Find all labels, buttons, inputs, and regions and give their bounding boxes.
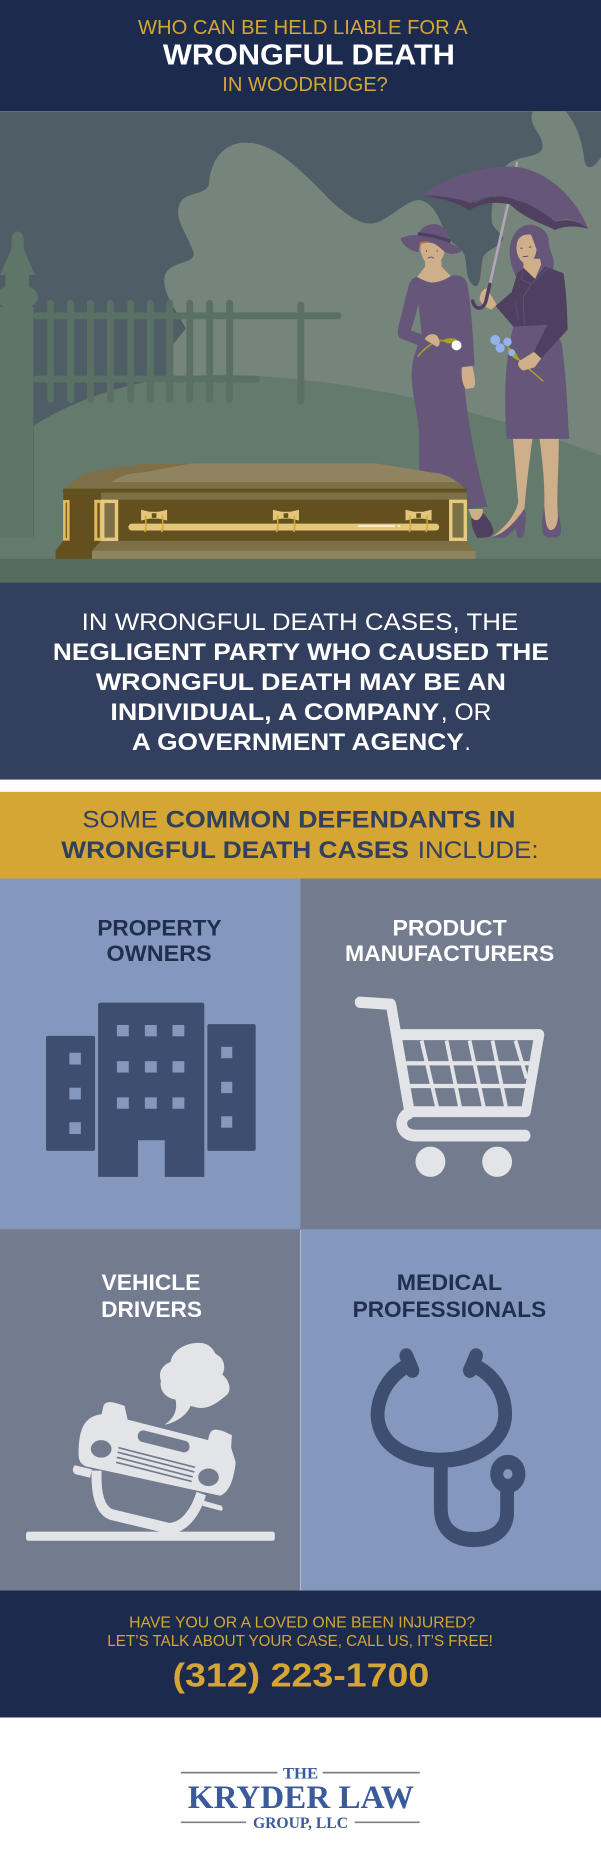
logo name: KRYDER LAW <box>188 1779 414 1815</box>
tile: property owners <box>0 879 300 1230</box>
hair <box>510 225 554 280</box>
intro line 1: IN WRONGFUL DEATH CASES, THE <box>82 608 518 635</box>
icon: stethoscope <box>378 1356 525 1540</box>
call to action panel <box>0 1591 601 1717</box>
legs <box>493 437 533 537</box>
handle bar <box>128 524 439 530</box>
tile heading: MANUFACTURERS <box>345 941 554 966</box>
tile heading: PROPERTY <box>97 915 222 941</box>
tile heading <box>97 915 222 966</box>
head <box>420 241 445 265</box>
bow middle <box>273 510 299 532</box>
skirt <box>505 325 569 439</box>
neck and chest <box>417 261 452 286</box>
flower <box>418 340 454 356</box>
hill <box>0 375 601 560</box>
flowers <box>508 347 543 381</box>
face <box>426 250 437 259</box>
hand holding flowers <box>518 352 541 371</box>
shaft top <box>516 162 517 171</box>
phone number: (312) 223-1700 <box>172 1656 429 1694</box>
illustration: funeral scene <box>0 111 601 585</box>
tile heading: MEDICAL <box>397 1270 502 1295</box>
logo rules <box>181 1773 420 1822</box>
car roof <box>97 1471 201 1528</box>
hat band <box>418 234 450 241</box>
tile: product manufacturers <box>300 879 601 1230</box>
intro line 4: INDIVIDUAL, A COMPANY <box>110 698 440 725</box>
trees <box>164 111 601 498</box>
cta line 2: LET’S TALK ABOUT YOUR CASE, CALL US, IT’S FREE! <box>107 1633 493 1650</box>
intro line 5: A GOVERNMENT AGENCY <box>132 728 464 755</box>
left end <box>56 489 101 559</box>
car body <box>79 1402 236 1496</box>
logo group: GROUP, LLC <box>253 1814 348 1832</box>
banner line 2: INCLUDE: <box>418 836 539 863</box>
face details <box>521 247 531 257</box>
canopy <box>422 167 588 229</box>
dark rim <box>63 489 467 493</box>
car details <box>91 1429 219 1486</box>
tile heading: DRIVERS <box>101 1297 202 1322</box>
canopy underside <box>422 194 588 230</box>
banner line 2: WRONGFUL DEATH CASES <box>61 836 409 863</box>
arm gap <box>411 304 422 334</box>
tile heading <box>345 915 554 966</box>
hand lower <box>462 366 475 389</box>
coffin <box>56 463 476 559</box>
icon: shopping cart <box>360 1002 539 1177</box>
hat crown <box>419 224 451 243</box>
tile heading <box>101 1270 202 1322</box>
corner brackets <box>64 501 465 539</box>
intro line 5: . <box>465 728 471 755</box>
defendants banner <box>0 792 601 879</box>
shoes <box>492 509 526 538</box>
car bumpers <box>73 1465 223 1511</box>
body <box>101 500 467 541</box>
smoke <box>160 1343 229 1425</box>
fence <box>33 300 342 405</box>
banner line 2 <box>61 836 539 863</box>
intro panel <box>0 583 601 780</box>
hand holding flower <box>425 334 440 347</box>
bow left <box>141 510 167 532</box>
icon: buildings <box>46 1003 256 1177</box>
hair <box>419 238 446 251</box>
banner line 1 <box>82 806 516 833</box>
header panel <box>0 0 601 111</box>
title line 2: WRONGFUL DEATH <box>163 39 455 71</box>
intro line 3: WRONGFUL DEATH MAY BE AN <box>96 668 506 695</box>
lid band <box>101 482 467 491</box>
tile heading: PRODUCT <box>392 915 507 941</box>
dress <box>398 275 488 509</box>
woman right <box>480 225 569 538</box>
ankle and shoe <box>468 509 483 523</box>
title line 1: WHO CAN BE HELD LIABLE FOR A <box>138 17 468 39</box>
hat brim <box>401 235 463 254</box>
lid <box>101 463 467 491</box>
upper moulding <box>101 493 467 500</box>
logo <box>181 1765 420 1832</box>
bow right <box>406 510 432 532</box>
banner line 1: COMMON DEFENDANTS IN <box>166 806 516 833</box>
jacket lines <box>516 267 549 326</box>
woman left <box>398 224 493 538</box>
jacket <box>496 266 568 358</box>
title line 3: IN WOODRIDGE? <box>222 74 388 96</box>
intro line 2: NEGLIGENT PARTY WHO CAUSED THE <box>53 638 549 665</box>
shaft <box>490 204 508 284</box>
icon: overturned car <box>26 1343 275 1541</box>
tile: medical professionals <box>300 1229 601 1591</box>
base mouldings <box>92 541 475 551</box>
cta line 1: HAVE YOU OR A LOVED ONE BEEN INJURED? <box>129 1614 475 1631</box>
tile: vehicle drivers <box>0 1229 300 1591</box>
ground <box>0 559 601 584</box>
tile heading <box>353 1270 546 1322</box>
banner line 1: SOME <box>82 806 158 833</box>
intro line 4: , OR <box>441 698 491 725</box>
tile heading: VEHICLE <box>102 1270 200 1295</box>
umbrella <box>422 162 588 308</box>
handle <box>473 284 490 308</box>
neck and face <box>523 259 541 279</box>
fence gate post <box>0 232 38 538</box>
hand on handle <box>480 288 497 310</box>
lid dark side <box>63 463 199 491</box>
logo the: THE <box>283 1765 318 1783</box>
road <box>26 1532 275 1541</box>
tile heading: OWNERS <box>107 941 212 966</box>
tile heading: PROFESSIONALS <box>353 1297 546 1322</box>
